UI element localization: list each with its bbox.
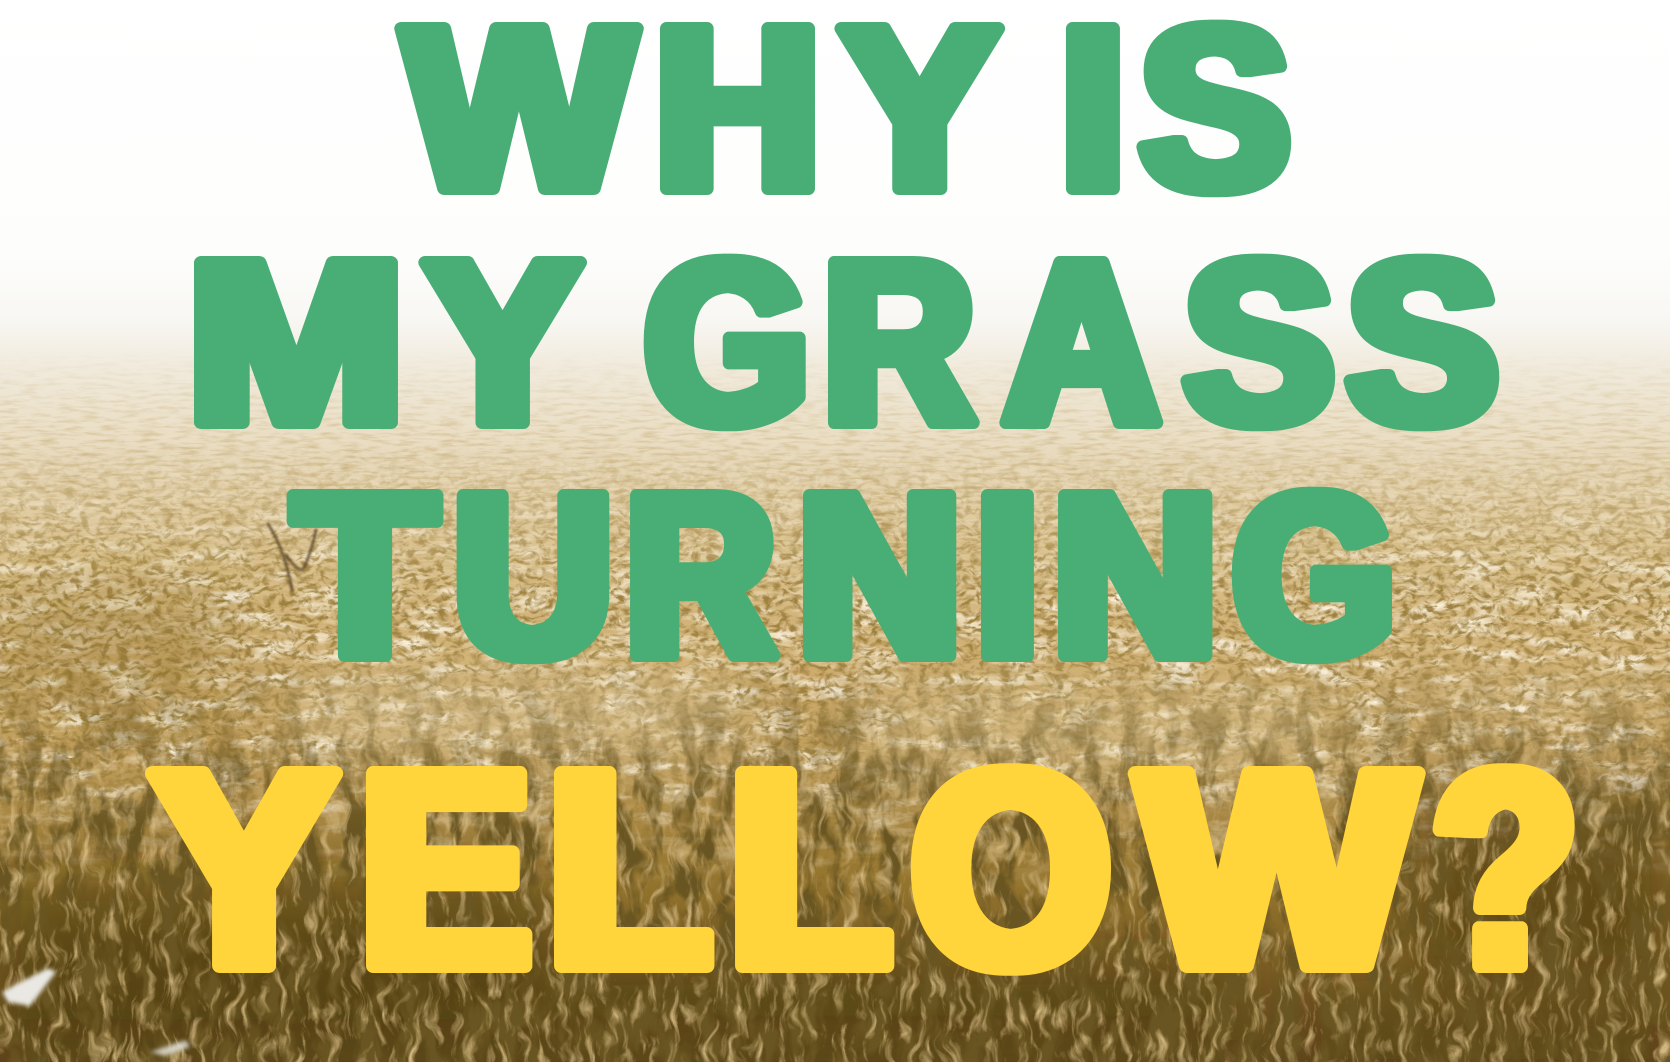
frost patches: [2, 968, 190, 1056]
title line: MY GRASS: S: [1347, 214, 1498, 472]
title line: YELLOW?: O: [912, 714, 1110, 1026]
title line: YELLOW?: ?: [1433, 714, 1577, 1026]
title line: MY GRASS: Y: [425, 214, 577, 472]
title line: TURNING: T: [294, 446, 436, 706]
title line: MY GRASS: G: [645, 214, 809, 472]
title line: YELLOW?: [153, 714, 1577, 1026]
title line: TURNING: N: [1053, 446, 1217, 706]
title line: TURNING: G: [1233, 446, 1395, 706]
title line: YELLOW?: L: [548, 714, 710, 1026]
title line: TURNING: N: [798, 446, 961, 706]
title line: MY GRASS: A: [1004, 214, 1159, 472]
title line: YELLOW?: W: [1140, 714, 1416, 1026]
title line: MY GRASS: S: [1184, 214, 1334, 472]
title line: MY GRASS: R: [824, 214, 974, 472]
title line: TURNING: R: [626, 446, 775, 706]
title line: YELLOW?: Y: [153, 714, 335, 1026]
title line: TURNING: I: [976, 446, 1039, 706]
dry twig: [268, 524, 316, 590]
title line: TURNING: U: [454, 446, 613, 706]
title line: YELLOW?: L: [730, 714, 890, 1026]
title lines in green: [188, 0, 1498, 706]
title line: MY GRASS: M: [188, 214, 404, 472]
title line: YELLOW?: E: [361, 714, 530, 1026]
